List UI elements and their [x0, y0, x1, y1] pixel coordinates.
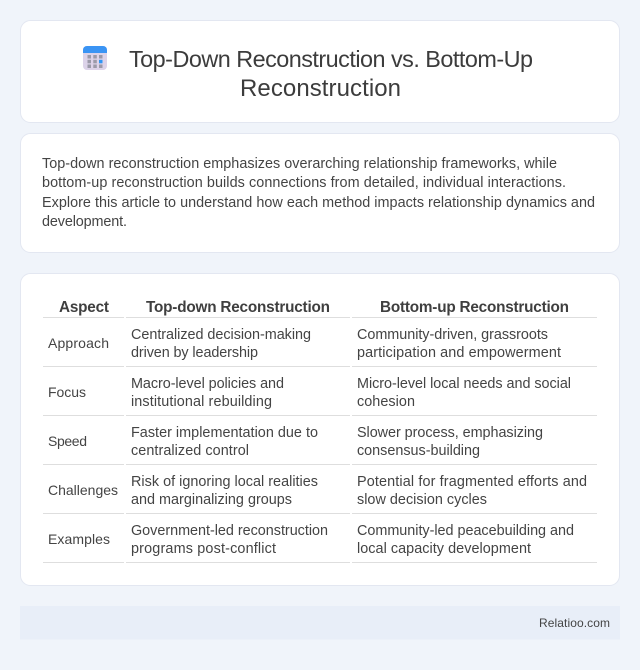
- table row: Challenges: [43, 474, 597, 514]
- table row: Approach: Community-driven, grassroots: [357, 327, 548, 343]
- panel: title card: [20, 20, 620, 122]
- title: Top-Down Reconstruction vs. Bottom-Up: [129, 46, 533, 72]
- table header row: Bottom-up Reconstruction: [380, 299, 569, 316]
- table row: Challenges: Potential for fragmented efforts and: [357, 474, 587, 490]
- table header row: [43, 299, 597, 318]
- table header row: Aspect: [59, 299, 109, 316]
- table row: Challenges: slow decision cycles: [357, 492, 487, 508]
- table row: Focus: Macro-level policies and: [131, 376, 284, 392]
- table row: Speed: Speed: [48, 433, 87, 449]
- table row: Focus: institutional rebuilding: [131, 394, 272, 410]
- table row: Approach: Centralized decision-making: [131, 327, 311, 343]
- table row: Approach: participation and empowerment: [357, 345, 561, 361]
- table row: Examples: Government-led reconstruction: [131, 523, 328, 539]
- text block: introduction: [42, 156, 595, 230]
- table header row: Top-down Reconstruction: [146, 299, 330, 316]
- table row: Speed: Slower process, emphasizing: [357, 425, 543, 441]
- text block: introduction: development.: [42, 214, 127, 230]
- table row: Examples: Community-led peacebuilding and: [357, 523, 574, 539]
- table row: Examples: local capacity development: [357, 541, 531, 557]
- table row: Challenges: and marginalizing groups: [131, 492, 292, 508]
- panel: comparison table: [20, 274, 620, 586]
- table row: Examples: [43, 523, 597, 563]
- text block: introduction: Top-down reconstruction emphasizes overarching relationship frameworks, while: [42, 156, 557, 172]
- text block: introduction: bottom-up reconstruction builds connections from detailed, individual interactions.: [42, 175, 566, 191]
- table row: Focus: [43, 376, 597, 416]
- footer text: Relatioo.com: [539, 616, 610, 630]
- table row: Focus: Micro-level local needs and social: [357, 376, 571, 392]
- title: [129, 46, 533, 102]
- table row: Approach: driven by leadership: [131, 345, 258, 361]
- table row: Examples: Examples: [48, 531, 110, 547]
- panel: introduction: [20, 134, 620, 252]
- table row: Speed: [43, 425, 597, 465]
- table row: Approach: [43, 327, 597, 367]
- table row: Focus: cohesion: [357, 394, 415, 410]
- text block: introduction: Explore this article to understand how each method impacts relationship dynamics and: [42, 195, 595, 211]
- table row: Speed: consensus-building: [357, 443, 480, 459]
- table row: Speed: Faster implementation due to: [131, 425, 318, 441]
- table row: Speed: centralized control: [131, 443, 249, 459]
- icon: calendar: [83, 46, 107, 70]
- table row: Challenges: Risk of ignoring local realities: [131, 474, 318, 490]
- footer bar: [20, 606, 620, 640]
- table row: Focus: Focus: [48, 384, 86, 400]
- table row: Examples: programs post-conflict: [131, 541, 276, 557]
- title: Reconstruction: [240, 75, 401, 102]
- table row: Challenges: Challenges: [48, 482, 118, 498]
- table row: Approach: Approach: [48, 335, 109, 351]
